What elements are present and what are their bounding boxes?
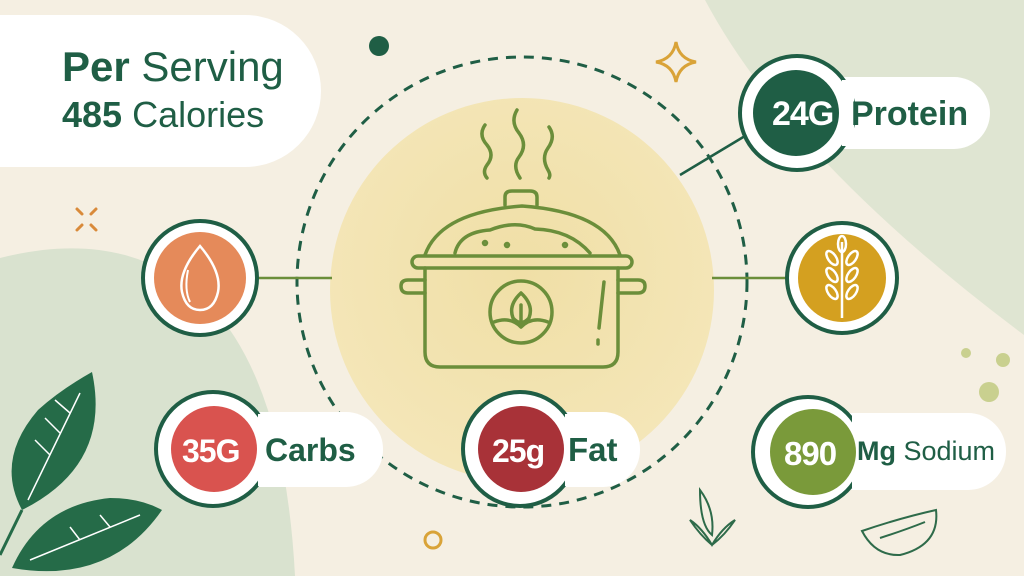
stat: carbs: Carbs bbox=[265, 432, 356, 468]
stat: protein: 24G bbox=[772, 95, 833, 133]
stat: protein: Protein bbox=[851, 95, 968, 133]
title pill: 485 Calories bbox=[62, 94, 264, 135]
stat: sodium: Mg Sodium bbox=[857, 436, 995, 466]
stat: fat bbox=[463, 392, 640, 506]
decor: dark green dot bbox=[369, 36, 389, 56]
stat: egg / fat-source circle bbox=[143, 221, 257, 335]
stat: wheat circle bbox=[787, 223, 897, 333]
dashed circle bbox=[297, 57, 747, 507]
decor: orange sparkle bbox=[77, 209, 96, 230]
stat: carbs bbox=[156, 392, 383, 506]
decor: gold star bbox=[656, 42, 696, 82]
background blob: top right bbox=[705, 0, 1024, 335]
decor: lime wedge outline bbox=[862, 510, 936, 555]
stat: fat: 25g bbox=[492, 433, 544, 469]
connector lines bbox=[258, 130, 790, 278]
stat: fat: Fat bbox=[568, 431, 618, 468]
stat: sodium: 890 bbox=[784, 435, 836, 472]
stat: carbs: 35G bbox=[182, 433, 239, 469]
central yellow circle bbox=[330, 98, 714, 482]
decor: leaves bbox=[0, 372, 162, 571]
icon: cooking pot bbox=[401, 110, 645, 367]
title pill bbox=[0, 15, 321, 167]
stat: sodium bbox=[753, 397, 1006, 507]
background blob: bottom left bbox=[0, 248, 295, 576]
decor: sprout outline bbox=[690, 490, 735, 545]
decor: gold ring bbox=[425, 532, 441, 548]
decor: olive dots bbox=[961, 348, 1010, 402]
title pill: Per Serving bbox=[62, 43, 284, 90]
stat: protein bbox=[740, 56, 990, 170]
